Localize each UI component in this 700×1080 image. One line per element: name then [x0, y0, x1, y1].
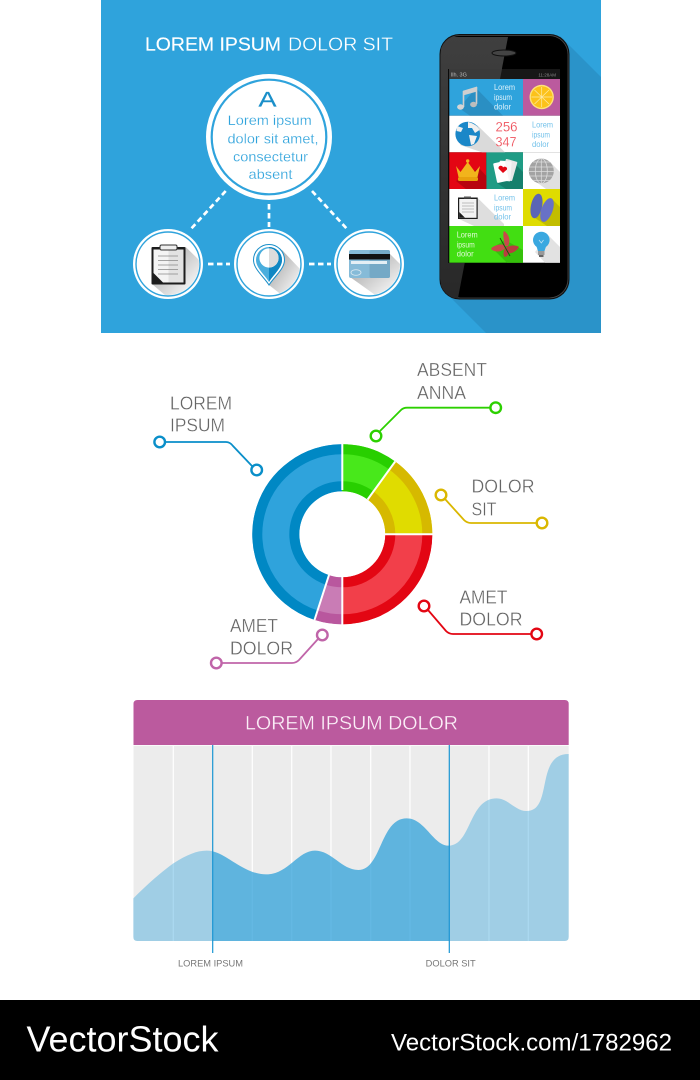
callout: amet dolor red	[419, 587, 542, 639]
tile text: lorem ipsum dolor 3: dolor	[494, 213, 511, 222]
icon: playing cards	[493, 159, 523, 189]
panel: blue header with phone	[101, 0, 601, 333]
donut chart	[224, 416, 461, 653]
icon: butterfly	[491, 231, 523, 263]
callout: absent anna	[371, 360, 501, 441]
main circle callout: A	[258, 89, 276, 112]
tile text: lorem ipsum dolor 2: dolor	[532, 140, 549, 149]
tile text: lorem ipsum dolor 1	[494, 83, 515, 111]
icon: map pin	[234, 229, 304, 299]
main circle callout: dolor sit amet,	[228, 130, 318, 146]
marker: dolor sit: DOLOR SIT	[426, 959, 476, 969]
tile text: lorem ipsum dolor 2: ipsum	[532, 131, 550, 140]
callout: lorem ipsum	[154, 393, 262, 475]
icon: music note	[457, 86, 503, 116]
icon: clipboard	[133, 229, 203, 299]
segment: blue	[235, 427, 449, 641]
tile text: lorem ipsum dolor 1: Lorem	[494, 83, 515, 92]
chart header: LOREM IPSUM DOLOR	[245, 712, 458, 734]
chart plot background	[134, 746, 569, 941]
highlighted range	[213, 818, 449, 941]
tile text: lorem ipsum dolor 1: dolor	[494, 102, 511, 111]
tile text: lorem ipsum dolor 3: Lorem	[494, 194, 515, 203]
callout: dolor sit: DOLOR	[472, 477, 534, 497]
callout: amet dolor purple	[211, 616, 328, 668]
segment: green	[257, 449, 427, 619]
callout: amet dolor red: DOLOR	[460, 610, 522, 630]
segment: purple	[257, 449, 427, 619]
main circle callout: Lorem ipsum	[228, 112, 312, 128]
callout: lorem ipsum: LOREM	[170, 393, 232, 413]
tile text: lorem ipsum dolor 2: Lorem	[532, 121, 553, 130]
icon: globe	[455, 122, 505, 152]
heading: DOLOR SIT	[288, 34, 393, 54]
callout: absent anna: ANNA	[417, 383, 466, 403]
icon: lemon	[530, 85, 554, 109]
tile text: lorem ipsum dolor 4	[457, 230, 478, 259]
icon: flip flops	[528, 193, 560, 226]
footer watermark bar: VectorStock.com/1782962	[391, 1030, 672, 1057]
phone long shadow	[448, 36, 601, 333]
marker: lorem ipsum: LOREM IPSUM	[178, 959, 243, 969]
status bar	[449, 69, 560, 79]
status bar: 11:28AM	[538, 72, 556, 78]
heading: LOREM IPSUM	[145, 34, 281, 54]
tile text: lorem ipsum dolor 4: Lorem	[457, 230, 478, 239]
callout: dolor sit: SIT	[472, 500, 496, 520]
tile text: lorem ipsum dolor 3	[494, 194, 515, 222]
footer watermark bar: VectorStock	[26, 1019, 219, 1060]
tile text: lorem ipsum dolor 1: ipsum	[494, 93, 512, 102]
icon: disco ball	[529, 158, 560, 189]
callout: lorem ipsum: IPSUM	[170, 416, 225, 436]
callout: dolor sit	[436, 477, 547, 528]
tile text: lorem ipsum dolor 4: dolor	[457, 250, 474, 259]
callout: amet dolor red: AMET	[460, 587, 508, 607]
area series	[133, 754, 569, 941]
callout: absent anna: ABSENT	[417, 360, 487, 380]
tile text: lorem ipsum dolor 2	[532, 121, 553, 149]
phone	[440, 34, 570, 300]
icon: small clipboard	[458, 196, 504, 226]
icon: light bulb	[533, 232, 560, 263]
main circle callout: consectetur	[233, 148, 308, 164]
heading	[145, 34, 393, 54]
segment: yellow	[224, 416, 461, 653]
main circle callout	[206, 74, 332, 200]
phone body	[440, 34, 570, 300]
icon: crown	[456, 159, 486, 189]
tile text: lorem ipsum dolor 4: ipsum	[457, 240, 475, 249]
tile text: lorem ipsum dolor 3: ipsum	[494, 203, 512, 212]
dashed connectors	[190, 191, 348, 264]
callout: amet dolor purple: AMET	[230, 616, 278, 636]
footer watermark bar	[0, 1000, 700, 1080]
tile text: numbers: 256	[496, 120, 518, 135]
main circle callout: absent	[248, 166, 293, 182]
status bar: llh. 3G	[451, 72, 467, 78]
tile text: numbers	[496, 120, 518, 150]
tile text: numbers: 347	[496, 135, 516, 150]
chart header	[134, 700, 569, 745]
segment: red	[257, 449, 427, 619]
callout: amet dolor purple: DOLOR	[230, 638, 293, 658]
icon: credit card	[334, 229, 404, 299]
area chart panel	[133, 700, 569, 969]
screen tile grid	[449, 79, 560, 263]
